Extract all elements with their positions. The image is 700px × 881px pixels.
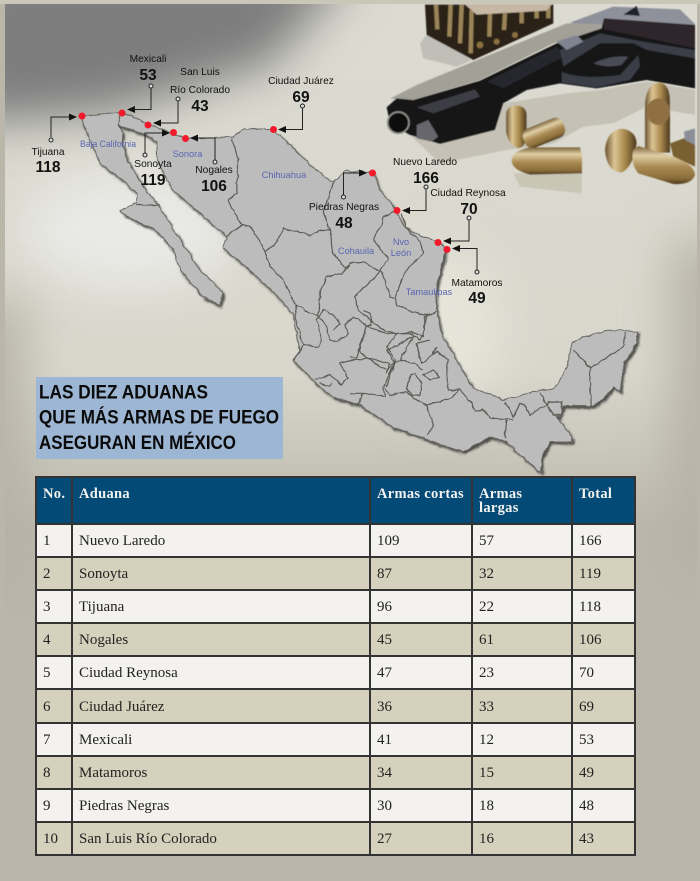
table rows: 32 xyxy=(479,566,494,582)
icon: bullets xyxy=(506,83,695,184)
map of Mexico xyxy=(80,112,637,473)
table rows: 87 xyxy=(377,566,392,582)
icon: ammunition box xyxy=(425,5,553,60)
table rows xyxy=(37,525,634,854)
callout: Ciudad Reynosa: 70 xyxy=(460,201,478,218)
table rows: 119 xyxy=(579,566,601,582)
map: Baja California peninsula xyxy=(82,112,223,305)
table header: Armas cortas xyxy=(377,486,464,502)
table rows: 30 xyxy=(377,798,392,814)
map: state names: León xyxy=(391,248,411,258)
table rows: Nuevo Laredo xyxy=(79,533,165,549)
table rows: 1 xyxy=(43,533,50,549)
table rows: 6 xyxy=(43,699,50,715)
map: state borders, centre-north xyxy=(242,183,435,387)
callout: Sonoyta: Sonoyta xyxy=(134,159,172,170)
table rows: 15 xyxy=(479,765,494,781)
table rows: 7 xyxy=(43,732,50,748)
callout: Piedras Negras: 48 xyxy=(335,215,353,232)
callout: Tijuana: Tijuana xyxy=(31,147,65,158)
table rows: 118 xyxy=(579,599,601,615)
table header: No. xyxy=(43,486,65,502)
table rows: Sonoyta xyxy=(79,566,128,582)
table rows: 33 xyxy=(479,699,494,715)
title box xyxy=(36,377,283,459)
callout: Nogales: Nogales xyxy=(195,165,233,176)
table rows: Ciudad Reynosa xyxy=(79,665,178,681)
table rows: 70 xyxy=(579,665,594,681)
table header: Armas xyxy=(479,486,522,502)
callout: Mexicali: 53 xyxy=(139,67,157,84)
table rows: 166 xyxy=(579,533,602,549)
table rows: 27 xyxy=(377,831,392,847)
map: mainland Mexico xyxy=(118,112,637,473)
map: state names: Tamaulipas xyxy=(406,287,453,297)
table rows: 57 xyxy=(479,533,494,549)
map: state names: Chihuahua xyxy=(262,170,307,180)
table rows: 16 xyxy=(479,831,494,847)
data table xyxy=(35,476,636,856)
callout: Tijuana xyxy=(31,112,86,176)
callout: San Luis Río Colorado: Río Colorado xyxy=(170,85,230,96)
table rows: 5 xyxy=(43,665,50,681)
callout: Ciudad Juárez: 69 xyxy=(292,89,310,106)
callout: Matamoros: 49 xyxy=(468,290,486,307)
callout: Ciudad Reynosa: Ciudad Reynosa xyxy=(430,188,506,199)
table rows: 8 xyxy=(43,765,50,781)
table rows: Piedras Negras xyxy=(79,798,169,814)
callout: Mexicali: Mexicali xyxy=(130,54,166,65)
callout: Sonoyta xyxy=(134,129,177,189)
table rows: 109 xyxy=(377,533,400,549)
callout: Piedras Negras: Piedras Negras xyxy=(309,202,379,213)
table rows: 41 xyxy=(377,732,392,748)
callout: Matamoros xyxy=(444,245,502,307)
map: state names: Baja California xyxy=(80,139,137,149)
table rows: 2 xyxy=(43,566,50,582)
table rows: 36 xyxy=(377,699,392,715)
map: state names: Nvo xyxy=(393,237,409,247)
table rows: 18 xyxy=(479,798,494,814)
callout: Nogales: 106 xyxy=(201,178,227,195)
callout: Mexicali xyxy=(118,54,166,116)
table header: Total xyxy=(579,486,612,502)
callout: Ciudad Juárez: Ciudad Juárez xyxy=(268,76,334,87)
table rows: 96 xyxy=(377,599,392,615)
callout: Ciudad Juárez xyxy=(268,76,334,133)
map: state names: Sonora xyxy=(173,149,203,159)
callout: Nuevo Laredo: 166 xyxy=(413,170,439,187)
title box: LAS DIEZ ADUANAS xyxy=(39,382,208,404)
table rows: Ciudad Juárez xyxy=(79,699,164,715)
callout: Nuevo Laredo: Nuevo Laredo xyxy=(393,157,457,168)
map: state borders, north-west xyxy=(137,138,242,237)
table rows: 61 xyxy=(479,632,494,648)
table rows: Nogales xyxy=(79,632,128,648)
photo: pistol and ammunition xyxy=(387,5,695,193)
table rows: 4 xyxy=(43,632,50,648)
table rows: 106 xyxy=(579,632,602,648)
callout: Matamoros: Matamoros xyxy=(452,278,502,289)
table header: Aduana xyxy=(79,486,130,502)
callout: Sonoyta: 119 xyxy=(140,172,166,189)
table rows: 49 xyxy=(579,765,594,781)
table rows: 47 xyxy=(377,665,392,681)
title box: ASEGURAN EN MÉXICO xyxy=(39,432,236,454)
table rows: 23 xyxy=(479,665,494,681)
table rows: Matamoros xyxy=(79,765,147,781)
table rows: 9 xyxy=(43,798,50,814)
table rows: 48 xyxy=(579,798,594,814)
callout: Ciudad Reynosa xyxy=(430,188,506,246)
table rows: Mexicali xyxy=(79,732,132,748)
background panel xyxy=(0,0,700,486)
icon: cast shadows xyxy=(410,30,695,193)
map: state names xyxy=(80,139,453,297)
callout: Nuevo Laredo xyxy=(393,157,457,214)
callout: San Luis Río Colorado: San Luis xyxy=(180,67,220,78)
table rows: San Luis Río Colorado xyxy=(79,831,217,847)
map: state borders, south and Yucatan xyxy=(350,310,625,438)
table rows: 69 xyxy=(579,699,594,715)
table rows: 43 xyxy=(579,831,594,847)
callout: San Luis Río Colorado: 43 xyxy=(191,98,209,115)
table rows: 34 xyxy=(377,765,392,781)
title box: QUE MÁS ARMAS DE FUEGO xyxy=(39,406,279,428)
callout: Tijuana: 118 xyxy=(35,159,61,176)
callout: Piedras Negras xyxy=(309,170,379,232)
table header: largas xyxy=(479,500,519,516)
table header xyxy=(37,478,634,523)
callout: San Luis Río Colorado xyxy=(144,67,230,128)
table rows: Tijuana xyxy=(79,599,124,615)
callout: Nogales xyxy=(182,134,233,195)
table rows: 22 xyxy=(479,599,494,615)
table rows: 53 xyxy=(579,732,594,748)
table rows: 45 xyxy=(377,632,392,648)
map: state names: Cohauila xyxy=(338,246,375,256)
icon: pistol xyxy=(387,6,695,144)
table rows: 10 xyxy=(43,831,58,847)
map: land and state borders xyxy=(82,112,637,473)
table rows: 3 xyxy=(43,599,50,615)
table rows: 12 xyxy=(479,732,494,748)
